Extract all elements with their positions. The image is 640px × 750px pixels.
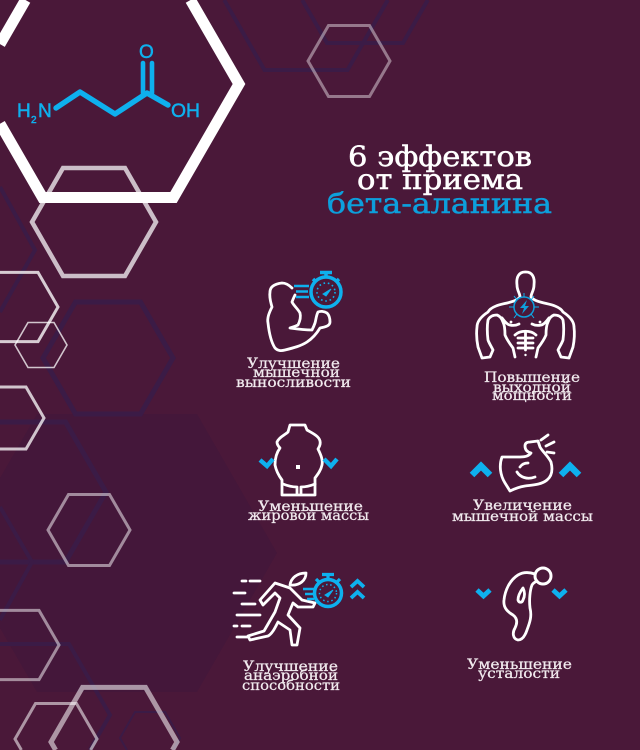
effect: muscular endurance [236,272,351,391]
effect: output power [477,272,580,404]
molecule: beta-alanine formula: N [38,101,52,122]
label: мощности [492,388,572,404]
label [484,370,580,404]
title: от приема [357,163,523,196]
label: мышечной [253,365,340,381]
icon: runner with stopwatch [234,573,364,645]
icon: flexed biceps with up chevrons [472,435,579,491]
label: усталости [478,666,560,682]
effect: anaerobic capacity [234,573,364,694]
molecule: beta-alanine formula: O [139,42,154,63]
icon: slumped figure with down chevrons [477,568,566,640]
title: бета-аланина [327,187,552,220]
effect: muscle mass [452,435,593,525]
label: анаэробной [244,668,338,684]
label [248,499,369,524]
label: Повышение [484,370,580,386]
effect: fatigue [467,568,572,682]
label: Уменьшение [258,499,363,515]
molecule: beta-alanine formula: 2 [31,115,37,126]
label: Уменьшение [467,657,572,673]
label: выходной [493,380,571,396]
label: Улучшение [243,659,338,675]
label: способности [242,678,340,694]
icon: belly with down chevrons [260,425,337,495]
label: Увеличение [473,498,572,514]
label [452,498,593,525]
label: выносливости [236,375,351,391]
label [467,657,572,682]
molecule: beta-alanine formula: H [17,101,31,122]
label [242,659,340,694]
molecule: beta-alanine formula [17,42,200,126]
icon: arm with stopwatch [268,272,341,351]
molecule: beta-alanine formula: OH [171,101,200,122]
label [236,356,351,391]
label: Улучшение [247,356,340,372]
icon: muscular torso with lightning [477,272,574,358]
label: мышечной массы [452,509,593,525]
title [327,140,552,220]
large white hexagon [0,0,239,198]
title: 6 эффектов [348,140,532,173]
label: жировой массы [248,508,369,524]
effect: fat mass [248,425,369,524]
background: hexagon pattern [0,0,428,750]
